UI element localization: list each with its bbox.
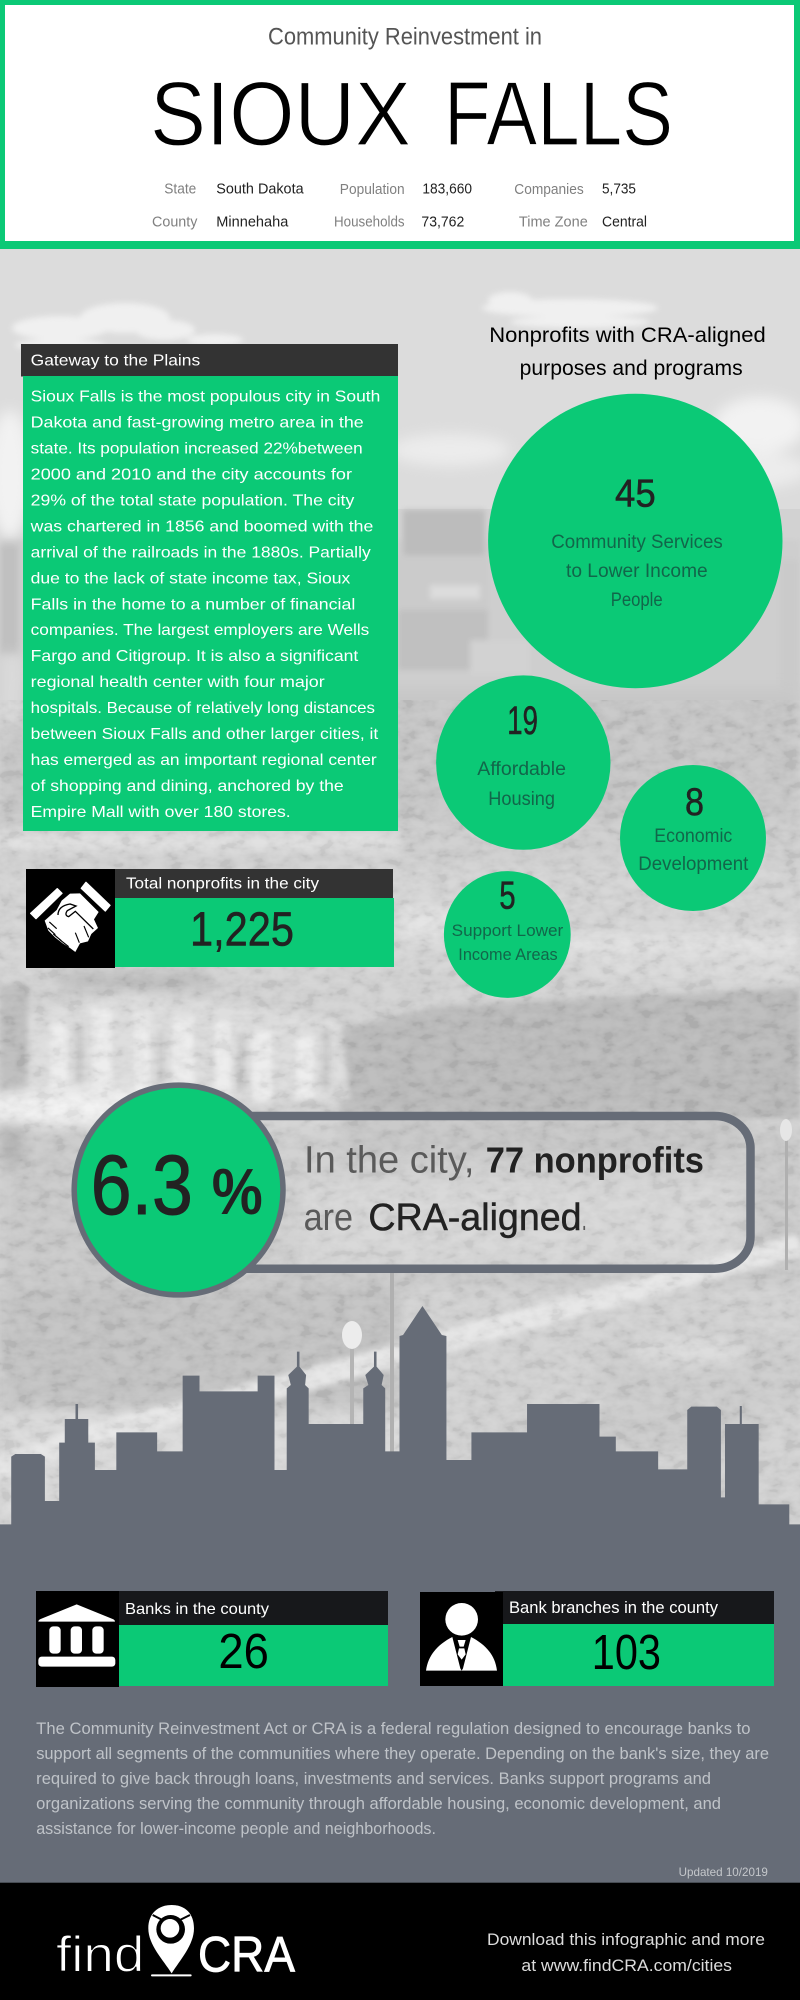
- body text: was chartered in 1856 and boomed with the: [30, 518, 373, 535]
- body text: 2000 and 2010 and the city accounts for: [31, 466, 353, 483]
- logo wordmark: CRA: [198, 1926, 296, 1982]
- card value: 103: [592, 1626, 661, 1680]
- body text: Dakota and fast-growing metro area in the: [31, 414, 364, 432]
- card heading: Bank branches in the county: [509, 1598, 718, 1617]
- body text: regional health center with four major: [31, 674, 325, 691]
- stat: county: County: [152, 215, 198, 231]
- body text: Sioux Falls is the most populous city in South: [31, 388, 380, 406]
- percentage badge: 6.3: [91, 1138, 193, 1232]
- panel: gateway to the plains: [21, 344, 398, 831]
- bubble: community services: [488, 394, 782, 688]
- download note: Download this infographic and more: [487, 1930, 765, 1949]
- city name: FALLS: [444, 64, 673, 165]
- stat: state: [164, 181, 305, 197]
- logo wordmark: find: [56, 1926, 144, 1982]
- paragraph: what the CRA is: The Community Reinvestment Act or CRA is a federal regulation designed to encourage banks to: [36, 1720, 750, 1738]
- stat: population: 183,660: [422, 181, 472, 197]
- stat card: total nonprofits: [26, 869, 394, 968]
- stat: county: Minnehaha: [216, 215, 289, 231]
- bubble: support lower income areas: Income Areas: [458, 945, 558, 964]
- panel heading: [21, 344, 398, 376]
- body text: Fargo and Citigroup. It is also a significant: [31, 648, 359, 665]
- card value: 26: [218, 1625, 269, 1679]
- icon: map pin with person: [148, 1905, 194, 1976]
- stat: state: State: [164, 181, 196, 197]
- stat: households: [334, 215, 464, 231]
- stat: companies: Companies: [514, 182, 584, 198]
- stat: county: [152, 215, 289, 231]
- paragraph: what the CRA is: assistance for lower-income people and neighborhoods.: [36, 1820, 436, 1838]
- icon: bank building: [36, 1591, 119, 1687]
- callout frame: [200, 1116, 750, 1269]
- logo: findCRA: [56, 1905, 296, 1982]
- stat: households: 73,762: [421, 215, 464, 231]
- body text: due to the lack of state income tax, Sioux: [31, 570, 350, 587]
- stat: households: Households: [334, 215, 405, 231]
- bubble: support lower income areas: Support Lower: [452, 921, 564, 940]
- percentage badge: %: [212, 1155, 263, 1228]
- stat: companies: [514, 181, 636, 198]
- card heading: [495, 1591, 774, 1624]
- bubble: community services: People: [611, 590, 663, 611]
- bubble: economic development: Development: [638, 854, 749, 875]
- bubble: affordable housing: Affordable: [477, 759, 566, 780]
- body text: companies. The largest employers are Wells: [31, 622, 369, 639]
- body text: state. Its population increased 22%between: [31, 440, 363, 457]
- paragraph: what the CRA is: organizations serving the community through affordable housing, economic development, and: [36, 1795, 721, 1813]
- card value: [503, 1624, 774, 1686]
- bubble: support lower income areas: 5: [499, 874, 516, 917]
- stat: time zone: Central: [602, 215, 647, 231]
- stat: state: South Dakota: [216, 181, 305, 197]
- stat: population: Population: [340, 182, 405, 198]
- footer band: [0, 1883, 800, 2000]
- stat: time zone: [519, 215, 647, 231]
- download note: at www.findCRA.com/cities: [521, 1956, 732, 1975]
- download note: [487, 1930, 765, 1975]
- card heading: [118, 1591, 388, 1625]
- stat: time zone: Time Zone: [519, 215, 588, 231]
- callout: share of CRA-aligned nonprofits: [74, 1085, 750, 1295]
- card heading: Banks in the county: [125, 1601, 269, 1618]
- paragraph: what the CRA is: [36, 1720, 769, 1838]
- bubble: economic development: Economic: [654, 826, 732, 847]
- callout text: In the city,: [304, 1140, 474, 1182]
- percentage badge: [74, 1085, 283, 1295]
- body text: hospitals. Because of relatively long distances: [31, 700, 375, 717]
- stat: companies: 5,735: [602, 181, 636, 197]
- city name: SIOUX: [150, 64, 411, 165]
- title line: Community Reinvestment in: [268, 24, 542, 50]
- bubble: community services: to Lower Income: [566, 561, 708, 582]
- callout text: 77 nonprofits: [486, 1140, 704, 1181]
- bubble: affordable housing: Housing: [488, 789, 555, 810]
- card value: 1,225: [190, 903, 294, 956]
- chart heading: nonprofits with CRA-aligned purposes: Nonprofits with CRA-aligned: [489, 324, 766, 347]
- header panel: [0, 0, 800, 249]
- card value: [119, 1625, 388, 1686]
- chart heading: nonprofits with CRA-aligned purposes: purposes and programs: [520, 357, 743, 380]
- stat: population: [340, 181, 472, 198]
- paragraph: what the CRA is: support all segments of the communities where they operate. Depending on the bank's size, they are: [36, 1745, 769, 1763]
- body text: has emerged as an important regional center: [31, 752, 377, 769]
- card heading: Total nonprofits in the city: [126, 876, 319, 892]
- bubble: affordable housing: 19: [507, 699, 538, 743]
- callout text: .: [582, 1197, 587, 1239]
- bubble: affordable housing: [436, 675, 610, 850]
- card heading: [115, 869, 393, 898]
- callout text: [304, 1140, 704, 1239]
- bubble: community services: Community Services: [551, 532, 723, 553]
- update date: Updated 10/2019: [679, 1865, 768, 1879]
- paragraph: what the CRA is: required to give back through loans, investments and services. Banks support programs and: [36, 1770, 711, 1788]
- icon: handshake: [26, 869, 115, 968]
- bubble: economic development: 8: [685, 781, 704, 824]
- callout text: are: [304, 1197, 353, 1239]
- body text: arrival of the railroads in the 1880s. Partially: [31, 544, 371, 561]
- body text: [23, 376, 398, 831]
- background photo: city and falls in greyscale: [0, 249, 800, 1525]
- city skyline silhouette and lower panel: [0, 1306, 800, 1883]
- panel heading: Gateway to the Plains: [31, 352, 200, 370]
- body text: between Sioux Falls and other larger cities, it: [31, 726, 379, 743]
- body text: Empire Mall with over 180 stores.: [31, 804, 291, 821]
- body text: 29% of the total state population. The city: [31, 492, 354, 509]
- body text: of shopping and dining, anchored by the: [31, 778, 344, 795]
- stat card: bank branches in the county: [420, 1591, 774, 1686]
- icon: banker: [420, 1592, 503, 1686]
- bubble: economic development: [620, 765, 766, 911]
- bubble: community services: 45: [615, 473, 656, 516]
- bubble: support lower income areas: [444, 871, 571, 998]
- stat card: banks in the county: [36, 1591, 388, 1687]
- body text: Falls in the home to a number of financial: [31, 596, 355, 613]
- callout text: CRA-aligned: [368, 1197, 582, 1239]
- card value: [115, 898, 394, 967]
